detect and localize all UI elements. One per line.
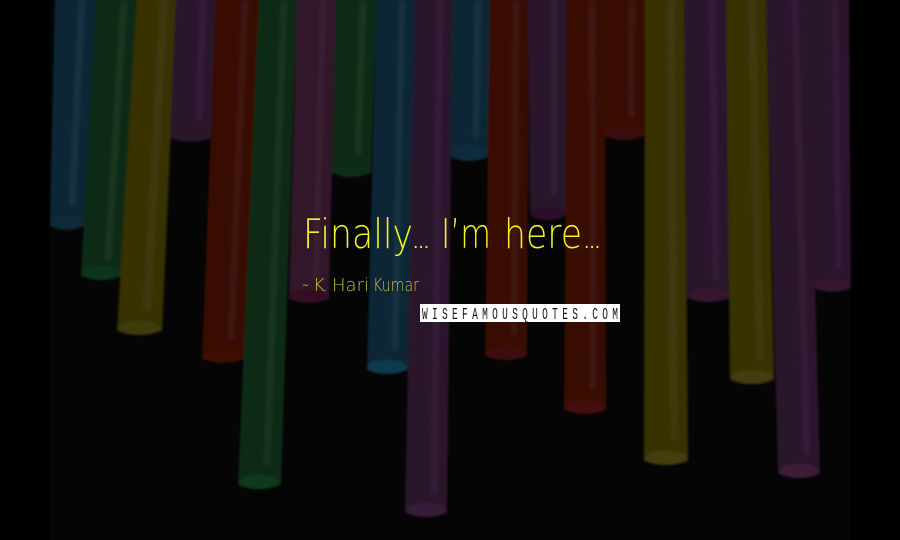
straw: blue 9 xyxy=(367,0,415,374)
author credit: ~ xyxy=(302,275,309,296)
straw: purple 10 xyxy=(405,0,453,517)
straw: yellow 3 xyxy=(117,0,177,335)
straw: green 2 xyxy=(81,0,137,280)
straw: blue 11 xyxy=(450,0,491,161)
author credit: Kumar xyxy=(373,275,419,296)
straw: green 8 xyxy=(332,0,377,177)
quote text: here xyxy=(504,210,582,258)
straw: yellow 18 xyxy=(726,0,774,384)
straw: yellow 16 xyxy=(644,0,688,465)
straw: red 5 xyxy=(202,0,259,363)
author credit: K. xyxy=(313,275,328,296)
watermark: wisefamousquotes.com: WISEFAMOUSQUOTES.COM xyxy=(422,307,618,325)
straw: purple 20 xyxy=(808,0,851,292)
straw: purple 4 xyxy=(170,0,217,142)
straw: green 6 xyxy=(238,0,297,489)
author credit: Hari xyxy=(332,275,369,296)
straw: red 15 xyxy=(604,0,645,140)
straw: purple 19 xyxy=(766,0,820,478)
straw: purple 17 xyxy=(684,0,730,302)
quote text: ... xyxy=(413,233,429,253)
straw: red 14 xyxy=(564,0,606,414)
straw: purple 13 xyxy=(528,0,567,220)
straw: mauve 7 xyxy=(289,0,336,303)
quote text: ... xyxy=(584,233,600,253)
straw: red 12 xyxy=(485,0,529,360)
straw: blue 1 xyxy=(50,0,96,230)
quote text: Finally xyxy=(303,210,413,258)
quote text: I’m xyxy=(441,210,491,258)
